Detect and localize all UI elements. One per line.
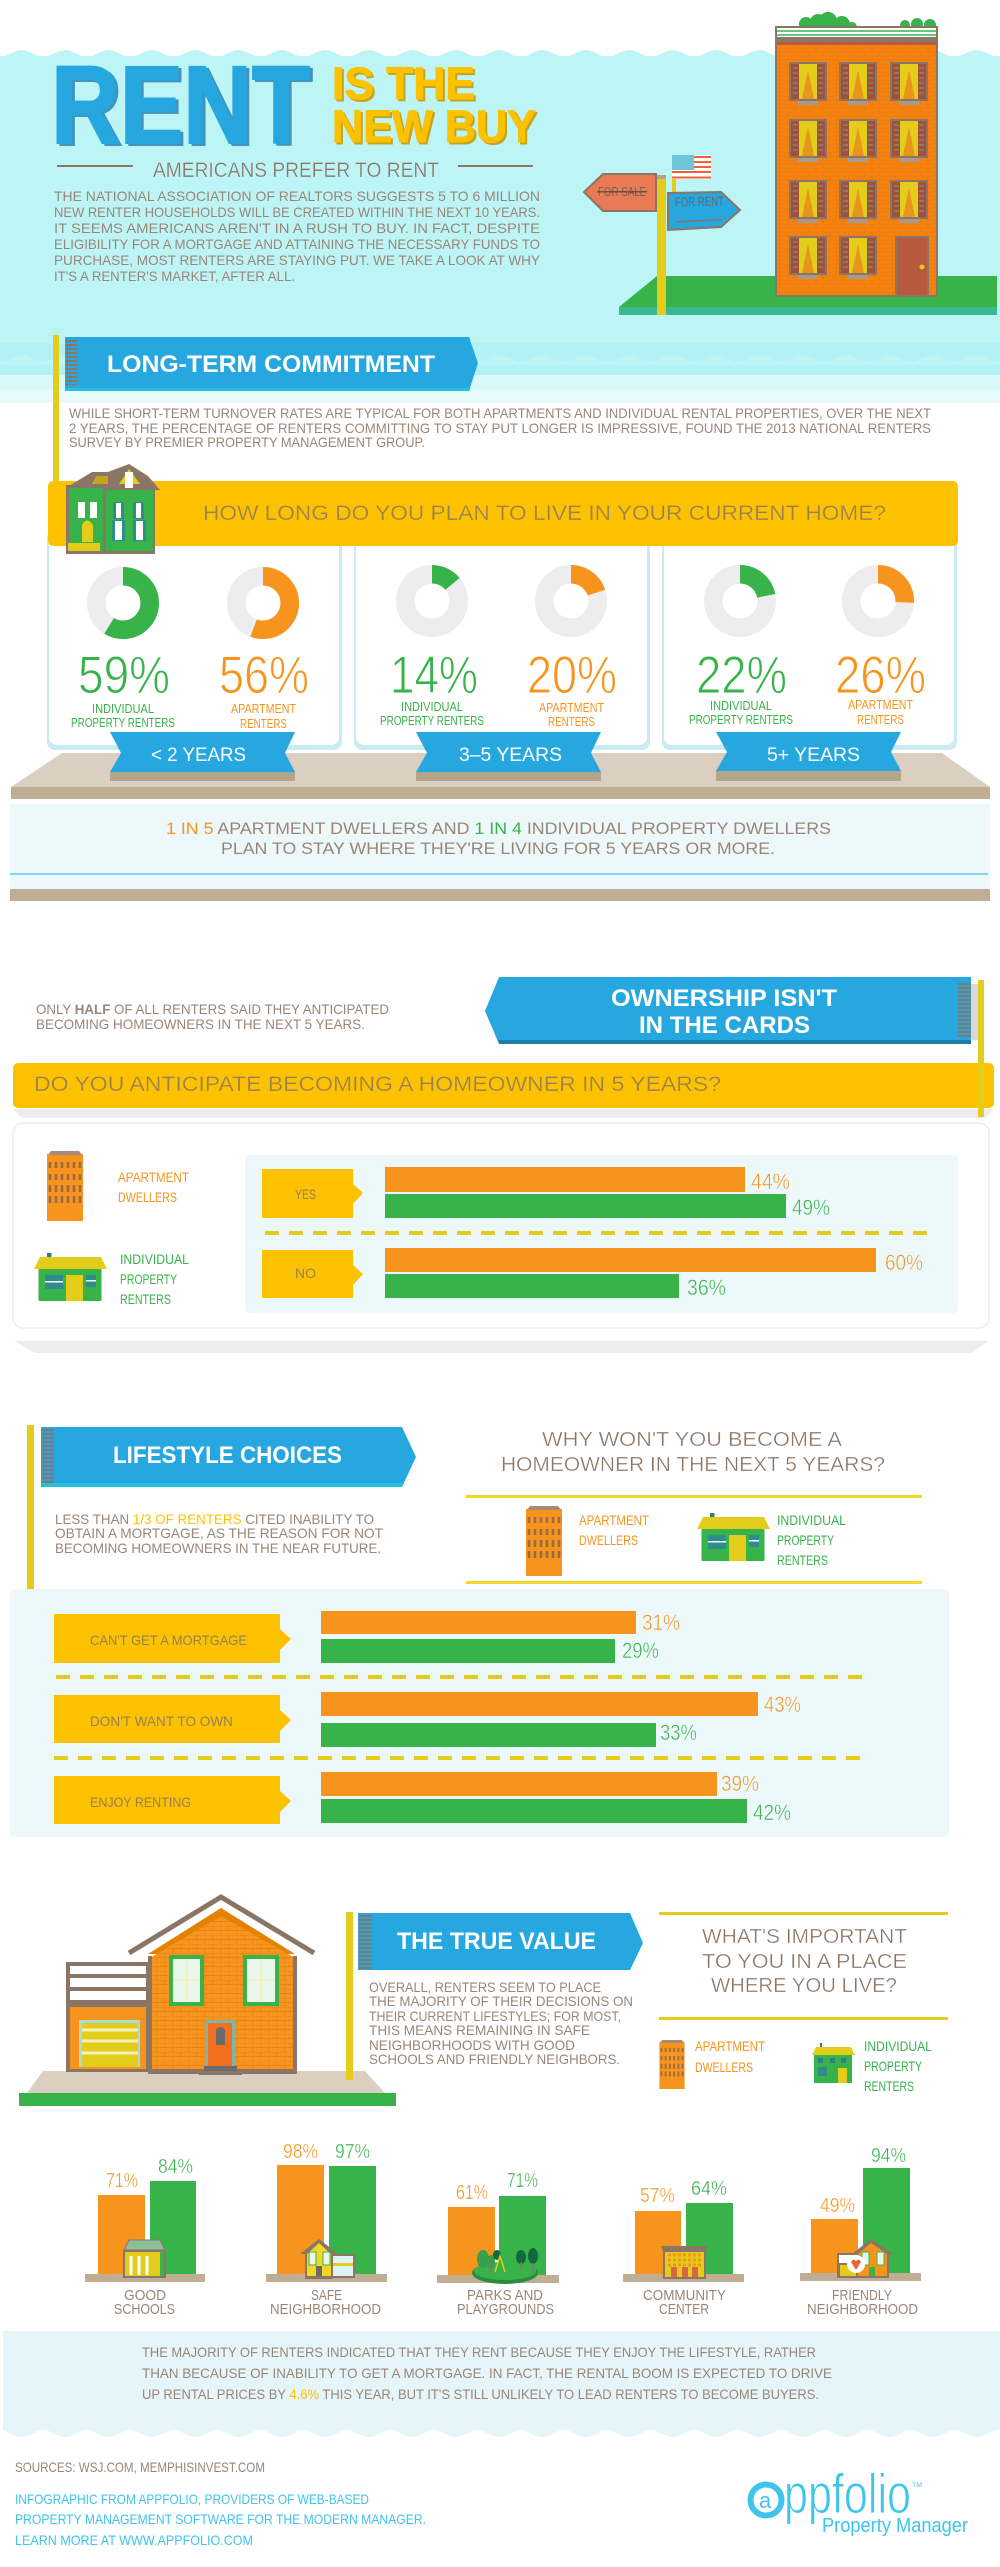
title: NEW BUY — [332, 101, 536, 152]
panel: 3-5 years: APARTMENT — [539, 700, 604, 715]
text: only half: ONLY HALF OF ALL RENTERS SAID THEY ANTICIPATED — [36, 1001, 389, 1017]
panel: 5+ years — [662, 530, 957, 750]
heading: why won't you: WHY WON'T YOU BECOME A — [542, 1429, 843, 1451]
bar chart: 44% — [751, 1169, 790, 1194]
text: sources: SOURCES: WSJ.COM, MEMPHISINVEST.COM — [15, 2459, 265, 2475]
text: long-term paragraph: SURVEY BY PREMIER PROPERTY MANAGEMENT GROUP. — [69, 434, 425, 450]
ground — [619, 276, 997, 307]
callout: 1 in 5: 1 IN 5 APARTMENT DWELLERS AND 1 IN 4 INDIVIDUAL PROPERTY DWELLERS — [166, 819, 831, 838]
heading: why won't you — [501, 1429, 885, 1476]
icon: community center — [661, 2246, 708, 2279]
text: credits: INFOGRAPHIC FROM APPFOLIO, PROVIDERS OF WEB-BASED — [15, 2491, 369, 2507]
bar group: safe neighborhood: 97% — [335, 2141, 370, 2163]
icon: signpost with flag: FOR SALE — [598, 184, 646, 199]
panel: homeowner chart — [13, 1123, 989, 1353]
intro paragraph: NEW RENTER HOUSEHOLDS WILL BE CREATED WITHIN THE NEXT 10 YEARS. — [54, 204, 540, 220]
panel: 5+ years: RENTERS — [857, 712, 904, 727]
icon: apartment building — [775, 12, 938, 297]
logo: appfolio: ppfolio — [784, 2462, 911, 2525]
bar group: community center — [623, 2178, 744, 2318]
panel: 3-5 years: 14% — [390, 646, 478, 705]
icon: safe house — [300, 2239, 355, 2279]
header background with scalloped wave — [0, 45, 1000, 403]
intro paragraph: ELIGIBILITY FOR A MORTGAGE AND ATTAINING THE NECESSARY FUNDS TO — [54, 236, 540, 252]
intro paragraph: PURCHASE, MOST RENTERS ARE STAYING PUT. WE TAKE A LOOK AT WHY — [54, 252, 541, 268]
panel: closing note — [3, 2331, 1000, 2438]
panel: less than 2 years: 56% — [219, 646, 309, 705]
icon: green house — [66, 464, 160, 554]
text: true value paragraph: NEIGHBORHOODS WITH GOOD — [369, 2037, 575, 2053]
section banner: ownership — [485, 977, 978, 1044]
ribbon: under 2 years: < 2 YEARS — [151, 745, 246, 766]
bar group: community center: 64% — [691, 2178, 727, 2200]
icon: friendly house — [837, 2239, 893, 2278]
icon: large orange house — [19, 1897, 396, 2106]
panel: less than 2 years: INDIVIDUAL — [92, 701, 154, 716]
legend: individual: PROPERTY — [120, 1271, 177, 1287]
panel: 3-5 years: INDIVIDUAL — [401, 699, 463, 714]
title: RENT — [51, 44, 310, 167]
logo: appfolio: Property Manager — [822, 2515, 968, 2537]
legend: individual: INDIVIDUAL — [120, 1251, 189, 1267]
logo: appfolio: a — [759, 2488, 772, 2513]
legend: lifestyle chart: APARTMENT — [579, 1512, 649, 1528]
text: less than 1/3 — [55, 1511, 383, 1556]
bar chart: reasons — [10, 1589, 949, 1837]
legend: lifestyle chart: INDIVIDUAL — [777, 1512, 846, 1528]
panel: closing note: UP RENTAL PRICES BY 4.6% THIS YEAR, BUT IT'S STILL UNLIKELY TO LEAD RENTERS TO BECOME BUYERS. — [142, 2386, 819, 2402]
ribbon: under 2 years — [110, 732, 295, 781]
bar group: parks and playgrounds: 61% — [456, 2182, 488, 2204]
bar chart: 49% — [792, 1195, 830, 1220]
icon: signpost with flag: FOR RENT — [675, 193, 724, 210]
legend: individual — [34, 1251, 189, 1307]
bar chart: reasons: 39% — [721, 1771, 759, 1796]
ribbon: 5+ years — [716, 732, 901, 781]
bar group: community center: 57% — [640, 2185, 675, 2207]
floor under the cards — [11, 753, 990, 799]
callout: 1 in 5 — [10, 804, 990, 901]
intro paragraph: IT'S A RENTER'S MARKET, AFTER ALL. — [54, 268, 295, 284]
intro paragraph: IT SEEMS AMERICANS AREN'T IN A RUSH TO BUY. IN FACT, DESPITE — [54, 220, 540, 236]
panel: 3-5 years: RENTERS — [548, 714, 595, 729]
section banner: lifestyle choices: LIFESTYLE CHOICES — [113, 1442, 342, 1469]
logo: appfolio: TM — [912, 2483, 922, 2489]
bar chart: 36% — [687, 1275, 726, 1300]
panel: closing note: THAN BECAUSE OF INABILITY TO GET A MORTGAGE. IN FACT, THE RENTAL BOOM IS EXPECTED TO DRIVE — [142, 2365, 832, 2381]
bar group: good schools: 71% — [106, 2170, 138, 2192]
text: true value paragraph: THEIR CURRENT LIFESTYLES; FOR MOST, — [369, 2008, 621, 2024]
text: less than 1/3: LESS THAN 1/3 OF RENTERS CITED INABILITY TO — [55, 1511, 374, 1527]
bar chart: reasons: DON'T WANT TO OWN — [90, 1713, 233, 1729]
panel: 5+ years: 26% — [835, 646, 926, 705]
panel: 5+ years: APARTMENT — [848, 697, 913, 712]
text: long-term paragraph: 2 YEARS, THE PERCENTAGE OF RENTERS COMMITTING TO STAY PUT LONGER IS IMPRESSIVE, FOUND THE 2013 NATIONAL RENTERS — [69, 420, 931, 436]
bar group: safe neighborhood: NEIGHBORHOOD — [270, 2301, 381, 2318]
bar group: parks and playgrounds: PLAYGROUNDS — [457, 2301, 554, 2318]
bar group: parks and playgrounds — [437, 2170, 559, 2318]
panel: 5+ years: PROPERTY RENTERS — [689, 712, 793, 727]
section banner: true value — [346, 1912, 643, 2080]
bar group: good schools — [85, 2156, 205, 2318]
panel: 3-5 years: 20% — [527, 646, 617, 705]
bar chart: reasons: 29% — [622, 1638, 659, 1663]
subtitle: AMERICANS PREFER TO RENT — [153, 159, 439, 182]
heading: why won't you: HOMEOWNER IN THE NEXT 5 YEARS? — [501, 1454, 885, 1476]
bar group: safe neighborhood: 98% — [283, 2141, 318, 2163]
heading bar: anticipate — [13, 980, 994, 1118]
legend: lifestyle chart: DWELLERS — [579, 1532, 638, 1548]
panel: less than 2 years: RENTERS — [240, 716, 287, 731]
title: IS THE — [332, 58, 475, 109]
callout: 1 in 5: PLAN TO STAY WHERE THEY'RE LIVING FOR 5 YEARS OR MORE. — [221, 839, 775, 858]
bar group: community center: COMMUNITY — [643, 2287, 726, 2304]
text: true value paragraph: THE MAJORITY OF THEIR DECISIONS ON — [369, 1993, 633, 2009]
legend: importance chart: INDIVIDUAL — [864, 2038, 932, 2054]
bar chart: reasons: CAN'T GET A MORTGAGE — [90, 1632, 247, 1648]
section banner: ownership: OWNERSHIP ISN'T — [611, 985, 837, 1012]
panel: 3-5 years — [354, 530, 650, 750]
text: only half — [36, 1001, 389, 1032]
section banner: true value: THE TRUE VALUE — [397, 1928, 596, 1955]
panel: less than 2 years — [47, 530, 342, 750]
panel: 5+ years: 22% — [696, 646, 787, 705]
intro paragraph: THE NATIONAL ASSOCIATION OF REALTORS SUGGESTS 5 TO 6 MILLION — [54, 188, 540, 204]
legend: importance chart: PROPERTY — [864, 2058, 922, 2074]
bar group: friendly neighborhood: FRIENDLY — [832, 2287, 892, 2304]
bar group: parks and playgrounds: 71% — [507, 2170, 538, 2192]
bar group: friendly neighborhood: NEIGHBORHOOD — [807, 2301, 918, 2318]
title — [51, 44, 536, 167]
bar group: good schools: GOOD — [124, 2287, 166, 2304]
legend: apartment: DWELLERS — [118, 1189, 177, 1205]
bar chart: YES — [295, 1186, 316, 1202]
panel: 5+ years: INDIVIDUAL — [710, 698, 772, 713]
bar group: community center: CENTER — [659, 2301, 709, 2318]
heading bar: how long — [48, 481, 958, 546]
section banner: ownership: IN THE CARDS — [639, 1012, 810, 1039]
panel: closing note: THE MAJORITY OF RENTERS INDICATED THAT THEY RENT BECAUSE THEY ENJOY THE LIFESTYLE, RATHER — [142, 2344, 816, 2360]
bar chart: reasons: 31% — [642, 1610, 680, 1635]
text: credits: PROPERTY MANAGEMENT SOFTWARE FOR THE MODERN MANAGER. — [15, 2511, 426, 2527]
bar group: safe neighborhood: SAFE — [311, 2287, 342, 2304]
ribbon: 5+ years: 5+ YEARS — [767, 745, 860, 766]
legend: importance chart: APARTMENT — [695, 2038, 765, 2054]
bar chart: reasons: ENJOY RENTING — [90, 1794, 191, 1810]
heading bar: anticipate: DO YOU ANTICIPATE BECOMING A HOMEOWNER IN 5 YEARS? — [34, 1073, 721, 1096]
bar chart — [245, 1155, 958, 1313]
text: credits — [15, 2491, 426, 2548]
legend: apartment — [47, 1151, 189, 1221]
heading: what's important: WHERE YOU LIVE? — [711, 1975, 897, 1997]
section banner: lifestyle choices — [27, 1425, 416, 1592]
bar group: good schools: SCHOOLS — [114, 2301, 175, 2318]
legend: lifestyle chart: PROPERTY — [777, 1532, 834, 1548]
section banner: long-term commitment — [53, 335, 478, 547]
bar group: parks and playgrounds: PARKS AND — [467, 2287, 543, 2304]
icon: park — [472, 2248, 538, 2284]
legend: apartment: APARTMENT — [118, 1169, 189, 1185]
bar chart: reasons: 33% — [660, 1720, 697, 1745]
bar chart: reasons: 43% — [764, 1692, 801, 1717]
bar chart: 60% — [885, 1250, 923, 1275]
bar group: safe neighborhood — [266, 2141, 387, 2318]
section banner: long-term commitment: LONG-TERM COMMITMENT — [107, 351, 435, 378]
text: true value paragraph: OVERALL, RENTERS SEEM TO PLACE — [369, 1979, 601, 1995]
legend: importance chart: DWELLERS — [695, 2059, 753, 2075]
text: true value paragraph: SCHOOLS AND FRIENDLY NEIGHBORS. — [369, 2051, 620, 2067]
panel: less than 2 years: APARTMENT — [231, 701, 296, 716]
legend: lifestyle chart: RENTERS — [777, 1552, 828, 1568]
text: true value paragraph: THIS MEANS REMAINING IN SAFE — [369, 2022, 590, 2038]
logo: appfolio — [750, 2462, 968, 2537]
text: long-term paragraph — [69, 405, 931, 450]
bar chart: NO — [295, 1265, 316, 1281]
bar group: friendly neighborhood — [800, 2145, 921, 2318]
text: credits: LEARN MORE AT WWW.APPFOLIO.COM — [15, 2532, 253, 2548]
text: true value paragraph — [369, 1979, 633, 2067]
icon: signpost with flag — [584, 155, 740, 315]
ground edge — [619, 307, 997, 315]
ribbon: 3-5 years: 3–5 YEARS — [459, 745, 562, 766]
text: only half: BECOMING HOMEOWNERS IN THE NEXT 5 YEARS. — [36, 1016, 365, 1032]
text: long-term paragraph: WHILE SHORT-TERM TURNOVER RATES ARE TYPICAL FOR BOTH APARTMENTS AND INDIVIDUAL RENTAL PROPERTIES, OVER THE NEXT — [69, 405, 931, 421]
icon: school — [123, 2240, 166, 2278]
bar group: friendly neighborhood: 49% — [820, 2195, 855, 2217]
panel: less than 2 years: 59% — [78, 646, 170, 705]
heading: what's important: WHAT'S IMPORTANT — [702, 1926, 907, 1948]
heading: what's important — [659, 1912, 948, 2020]
bar chart: reasons: 42% — [753, 1800, 791, 1825]
panel: less than 2 years: PROPERTY RENTERS — [71, 715, 175, 730]
legend: individual: RENTERS — [120, 1291, 171, 1307]
legend: importance chart: RENTERS — [864, 2078, 914, 2094]
intro paragraph — [54, 188, 541, 284]
bar group: good schools: 84% — [158, 2156, 193, 2178]
heading bar: how long: HOW LONG DO YOU PLAN TO LIVE IN YOUR CURRENT HOME? — [203, 502, 886, 525]
bar group: friendly neighborhood: 94% — [871, 2145, 906, 2167]
legend: importance chart — [659, 2038, 932, 2094]
text: less than 1/3: BECOMING HOMEOWNERS IN THE NEAR FUTURE. — [55, 1540, 381, 1556]
panel: 3-5 years: PROPERTY RENTERS — [380, 713, 484, 728]
heading: what's important: TO YOU IN A PLACE — [702, 1951, 907, 1973]
legend: lifestyle chart — [466, 1495, 922, 1584]
ribbon: 3-5 years — [416, 732, 601, 781]
text: less than 1/3: OBTAIN A MORTGAGE, AS THE REASON FOR NOT — [55, 1525, 383, 1541]
